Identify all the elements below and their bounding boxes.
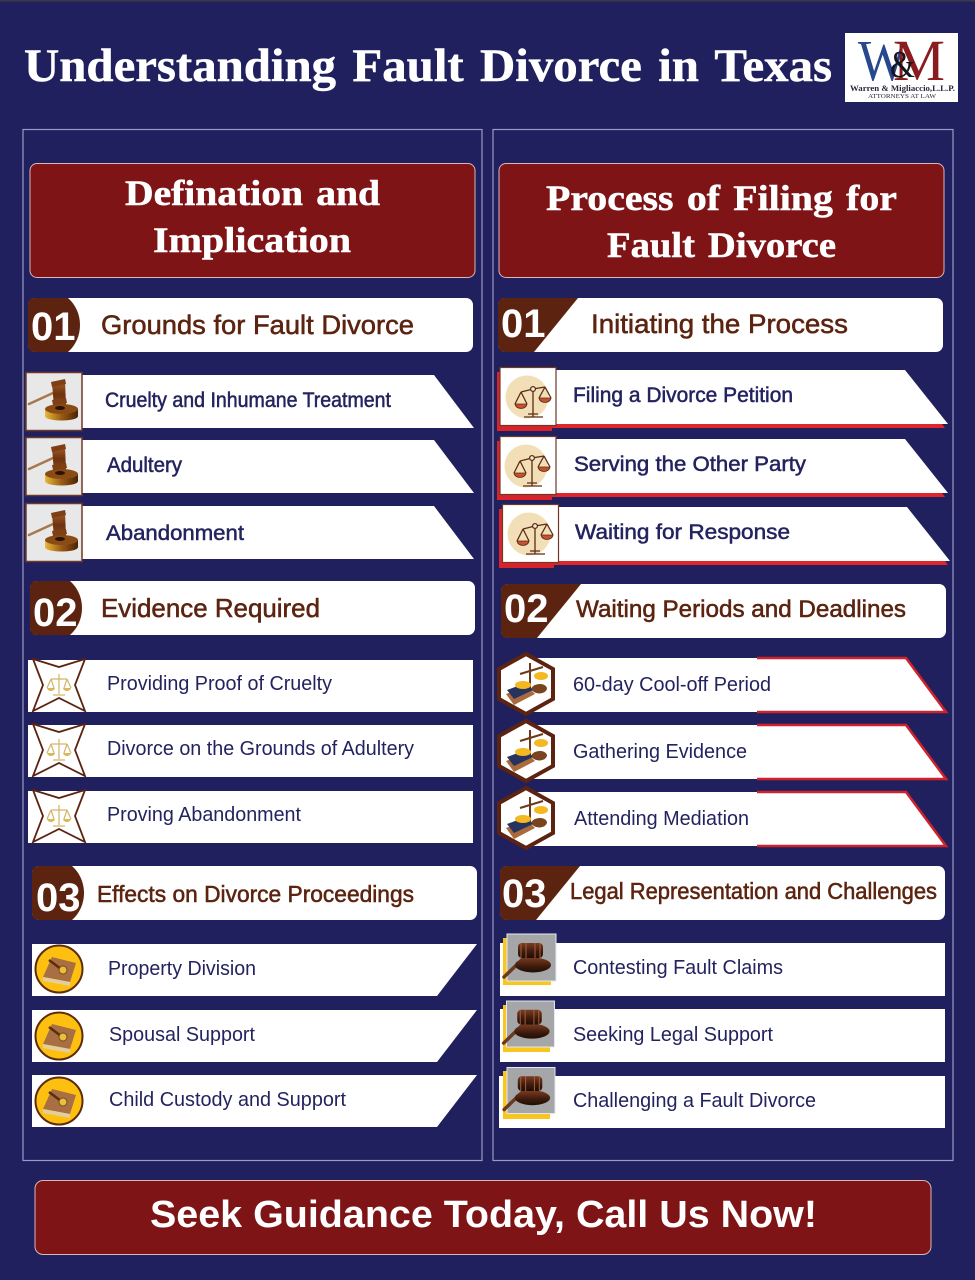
item: serving the other party [497,436,948,500]
section 02: evidence [30,581,475,635]
item: challenging a fault divorce: Challenging a Fault Divorce [573,1090,816,1112]
item: contesting claims [500,934,945,996]
section 03: effects: 03 [36,876,80,920]
section 03: effects [32,866,477,920]
item: adultery: Adultery [107,454,182,477]
item: cruelty [26,372,474,430]
item: spousal support: Spousal Support [109,1024,255,1046]
item: property division [32,944,477,996]
heading: definition [30,164,475,278]
item: contesting claims: Contesting Fault Claims [573,957,783,979]
item: proving abandonment: Proving Abandonment [107,804,301,826]
item: child custody: Child Custody and Support [109,1089,346,1111]
item: waiting for response: Waiting for Response [575,521,790,544]
title: Understanding Fault Divorce in Texas [24,40,832,92]
section 01: initiating: 01 [501,302,546,346]
item: adultery [26,438,474,496]
item: attending mediation [499,788,946,848]
item: cruelty: Cruelty and Inhumane Treatment [105,389,391,412]
section 02: evidence: 02 [33,591,78,635]
logo [845,28,958,102]
item: seeking legal support: Seeking Legal Support [573,1024,773,1046]
item: attending mediation: Attending Mediation [574,808,749,830]
item: proof of cruelty [28,659,473,712]
section 01: initiating [498,298,943,352]
item: cool-off period: 60-day Cool-off Period [573,674,771,696]
logo: ATTORNEYS AT LAW [868,94,936,100]
heading: process: Process of Filing for [546,178,897,218]
item: waiting for response [499,504,950,568]
section 03: legal representation: 03 [502,872,546,916]
heading: process [499,164,944,278]
heading: definition: Implication [153,220,351,260]
heading: process: Fault Divorce [607,225,836,265]
section 03: effects: Effects on Divorce Proceedings [97,881,414,907]
section 03: legal representation: Legal Representation and Challenges [570,878,937,904]
section 02: waiting periods [501,584,946,638]
item: challenging a fault divorce [499,1067,945,1128]
panel: process of filing [493,130,953,1160]
item: filing a petition [497,368,948,431]
logo: & [890,44,915,86]
item: grounds of adultery [28,724,473,777]
section 01: grounds [28,298,473,352]
item: serving the other party: Serving the Other Party [574,453,807,476]
item: abandonment [26,504,474,562]
section 02: evidence: Evidence Required [101,593,320,623]
section 01: grounds: Grounds for Fault Divorce [101,310,414,340]
call to action [35,1180,931,1254]
item: seeking legal support [500,1001,945,1062]
call to action: Seek Guidance Today, Call Us Now! [150,1194,817,1236]
logo: Warren & Migliaccio,L.L.P. [850,84,955,93]
heading: definition: Defination and [125,173,380,213]
section 02: waiting periods: Waiting Periods and Deadlines [576,596,906,623]
logo: M [893,28,945,93]
item: proving abandonment [28,790,473,843]
item: gathering evidence: Gathering Evidence [573,741,747,763]
panel: definition and implication [23,130,482,1160]
section 02: waiting periods: 02 [504,587,548,631]
section 01: initiating: Initiating the Process [591,309,848,339]
item: filing a petition: Filing a Divorce Petition [573,384,793,407]
item: gathering evidence [499,721,946,781]
item: proof of cruelty: Providing Proof of Cruelty [107,673,332,695]
logo: W [858,28,907,93]
item: property division: Property Division [108,958,256,980]
item: spousal support [32,1010,477,1062]
section 01: grounds: 01 [31,305,76,349]
item: grounds of adultery: Divorce on the Grounds of Adultery [107,738,414,760]
item: abandonment: Abandonment [106,522,244,545]
item: cool-off period [499,654,946,714]
section 03: legal representation [500,866,945,920]
item: child custody [32,1075,477,1127]
